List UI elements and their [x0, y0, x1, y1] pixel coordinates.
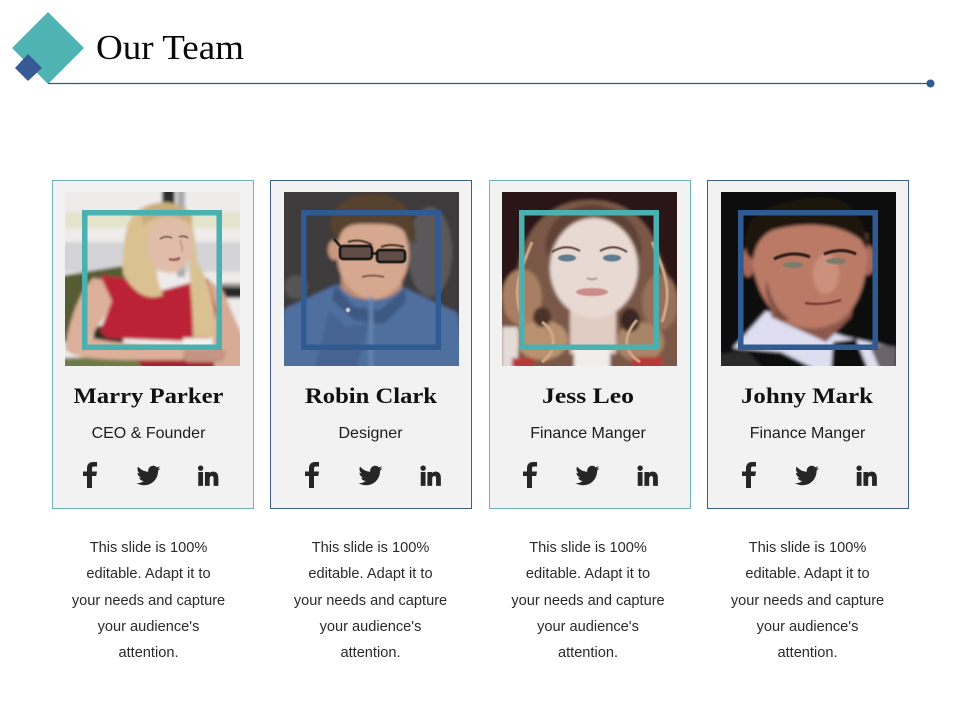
icon: facebook	[742, 462, 756, 488]
description: Marry Parker: your audience's	[98, 619, 199, 635]
description: Robin Clark: your needs and capture	[294, 593, 447, 609]
description: Marry Parker: attention.	[118, 645, 179, 661]
role: Designer	[338, 425, 403, 442]
panel: Jess Leo	[490, 180, 690, 508]
name: Johny Mark	[741, 383, 874, 408]
icon: linkedin	[198, 466, 218, 486]
photo: Robin Clark	[284, 192, 459, 366]
card background	[490, 180, 690, 508]
photo: Jess Leo	[502, 192, 677, 366]
icon: facebook	[83, 462, 97, 488]
description: Marry Parker: This slide is 100%	[90, 540, 207, 556]
card background	[52, 180, 254, 508]
description: Johny Mark: attention.	[777, 645, 838, 661]
panel: Robin Clark	[270, 180, 472, 508]
blue photo frame	[304, 213, 438, 347]
name: Jess Leo	[542, 383, 634, 408]
icon: linkedin	[638, 466, 658, 486]
description: Johny Mark: editable. Adapt it to	[745, 566, 870, 582]
description: Robin Clark: attention.	[340, 645, 401, 661]
icon: twitter	[358, 466, 382, 485]
description: Jess Leo: your audience's	[537, 619, 639, 635]
description: Johny Mark: your audience's	[757, 619, 858, 635]
photo: Marry Parker	[65, 192, 240, 366]
panel: Johny Mark	[708, 180, 908, 508]
description: Marry Parker: your needs and capture	[72, 593, 225, 609]
name: Marry Parker	[74, 383, 224, 408]
icon: twitter	[576, 466, 600, 485]
role: CEO & Founder	[92, 425, 206, 442]
description: Jess Leo: editable. Adapt it to	[526, 566, 650, 582]
header logo: diamonds	[12, 12, 84, 84]
photo: Johny Mark	[721, 192, 896, 366]
icon: twitter	[795, 466, 819, 485]
title: Our Team	[96, 28, 244, 67]
description: Robin Clark: This slide is 100%	[312, 540, 429, 556]
role: Finance Manger	[750, 425, 866, 442]
icon: twitter	[136, 466, 160, 485]
description: Jess Leo: your needs and capture	[511, 593, 665, 609]
card background	[708, 180, 908, 508]
blue photo frame	[741, 213, 875, 347]
description: Jess Leo: This slide is 100%	[529, 540, 647, 556]
card background	[270, 180, 472, 508]
icon: linkedin	[421, 466, 441, 486]
icon: facebook	[305, 462, 319, 488]
header rule with end dot	[48, 80, 934, 88]
description: Marry Parker: editable. Adapt it to	[86, 566, 211, 582]
name: Robin Clark	[305, 383, 438, 408]
description: Jess Leo: attention.	[558, 645, 618, 661]
panel: Marry Parker	[52, 180, 254, 508]
icon: facebook	[523, 462, 537, 488]
description: Johny Mark: This slide is 100%	[749, 540, 866, 556]
teal photo frame	[522, 213, 656, 347]
description: Robin Clark: editable. Adapt it to	[308, 566, 433, 582]
description: Robin Clark: your audience's	[320, 619, 421, 635]
icon: linkedin	[857, 466, 877, 486]
role: Finance Manger	[530, 425, 646, 442]
description: Johny Mark: your needs and capture	[731, 593, 884, 609]
teal photo frame	[85, 213, 219, 347]
